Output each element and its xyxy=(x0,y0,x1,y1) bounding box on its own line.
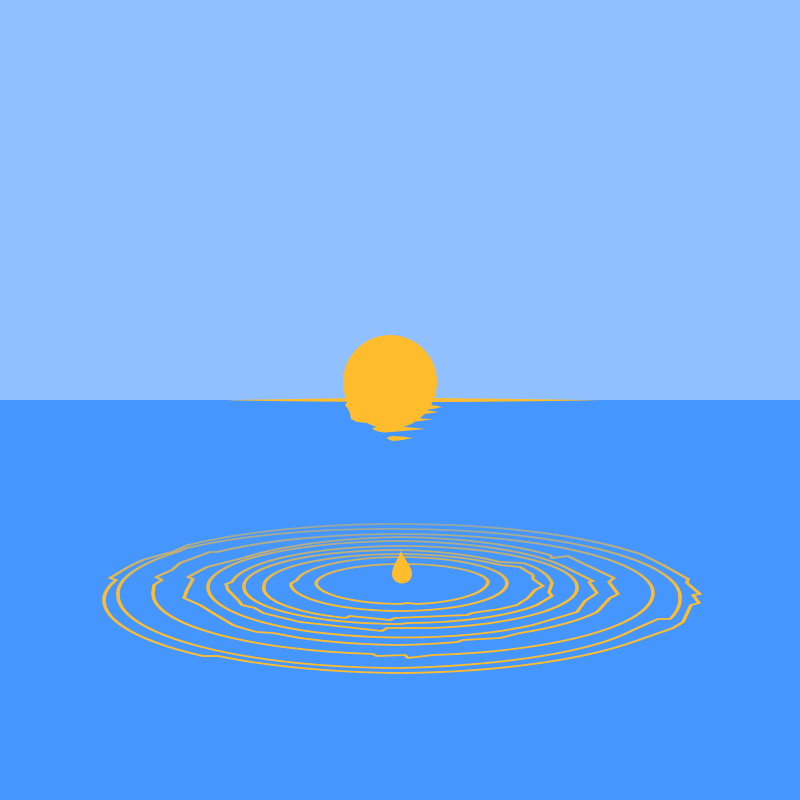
ring 8 xyxy=(153,534,653,658)
ring 7 xyxy=(184,537,618,645)
sea xyxy=(0,400,800,800)
sky xyxy=(0,0,800,400)
ring 3 xyxy=(264,554,543,620)
ring 4 xyxy=(244,550,552,624)
ring 9 xyxy=(118,529,680,668)
sun with reflection xyxy=(226,335,600,441)
ripple rings xyxy=(104,524,700,673)
ring 2 xyxy=(291,557,507,611)
ring 1 xyxy=(316,564,488,604)
water drop xyxy=(392,550,412,584)
ring 5 xyxy=(226,546,577,631)
ring 10 xyxy=(104,524,700,673)
ring 6 xyxy=(208,541,597,638)
